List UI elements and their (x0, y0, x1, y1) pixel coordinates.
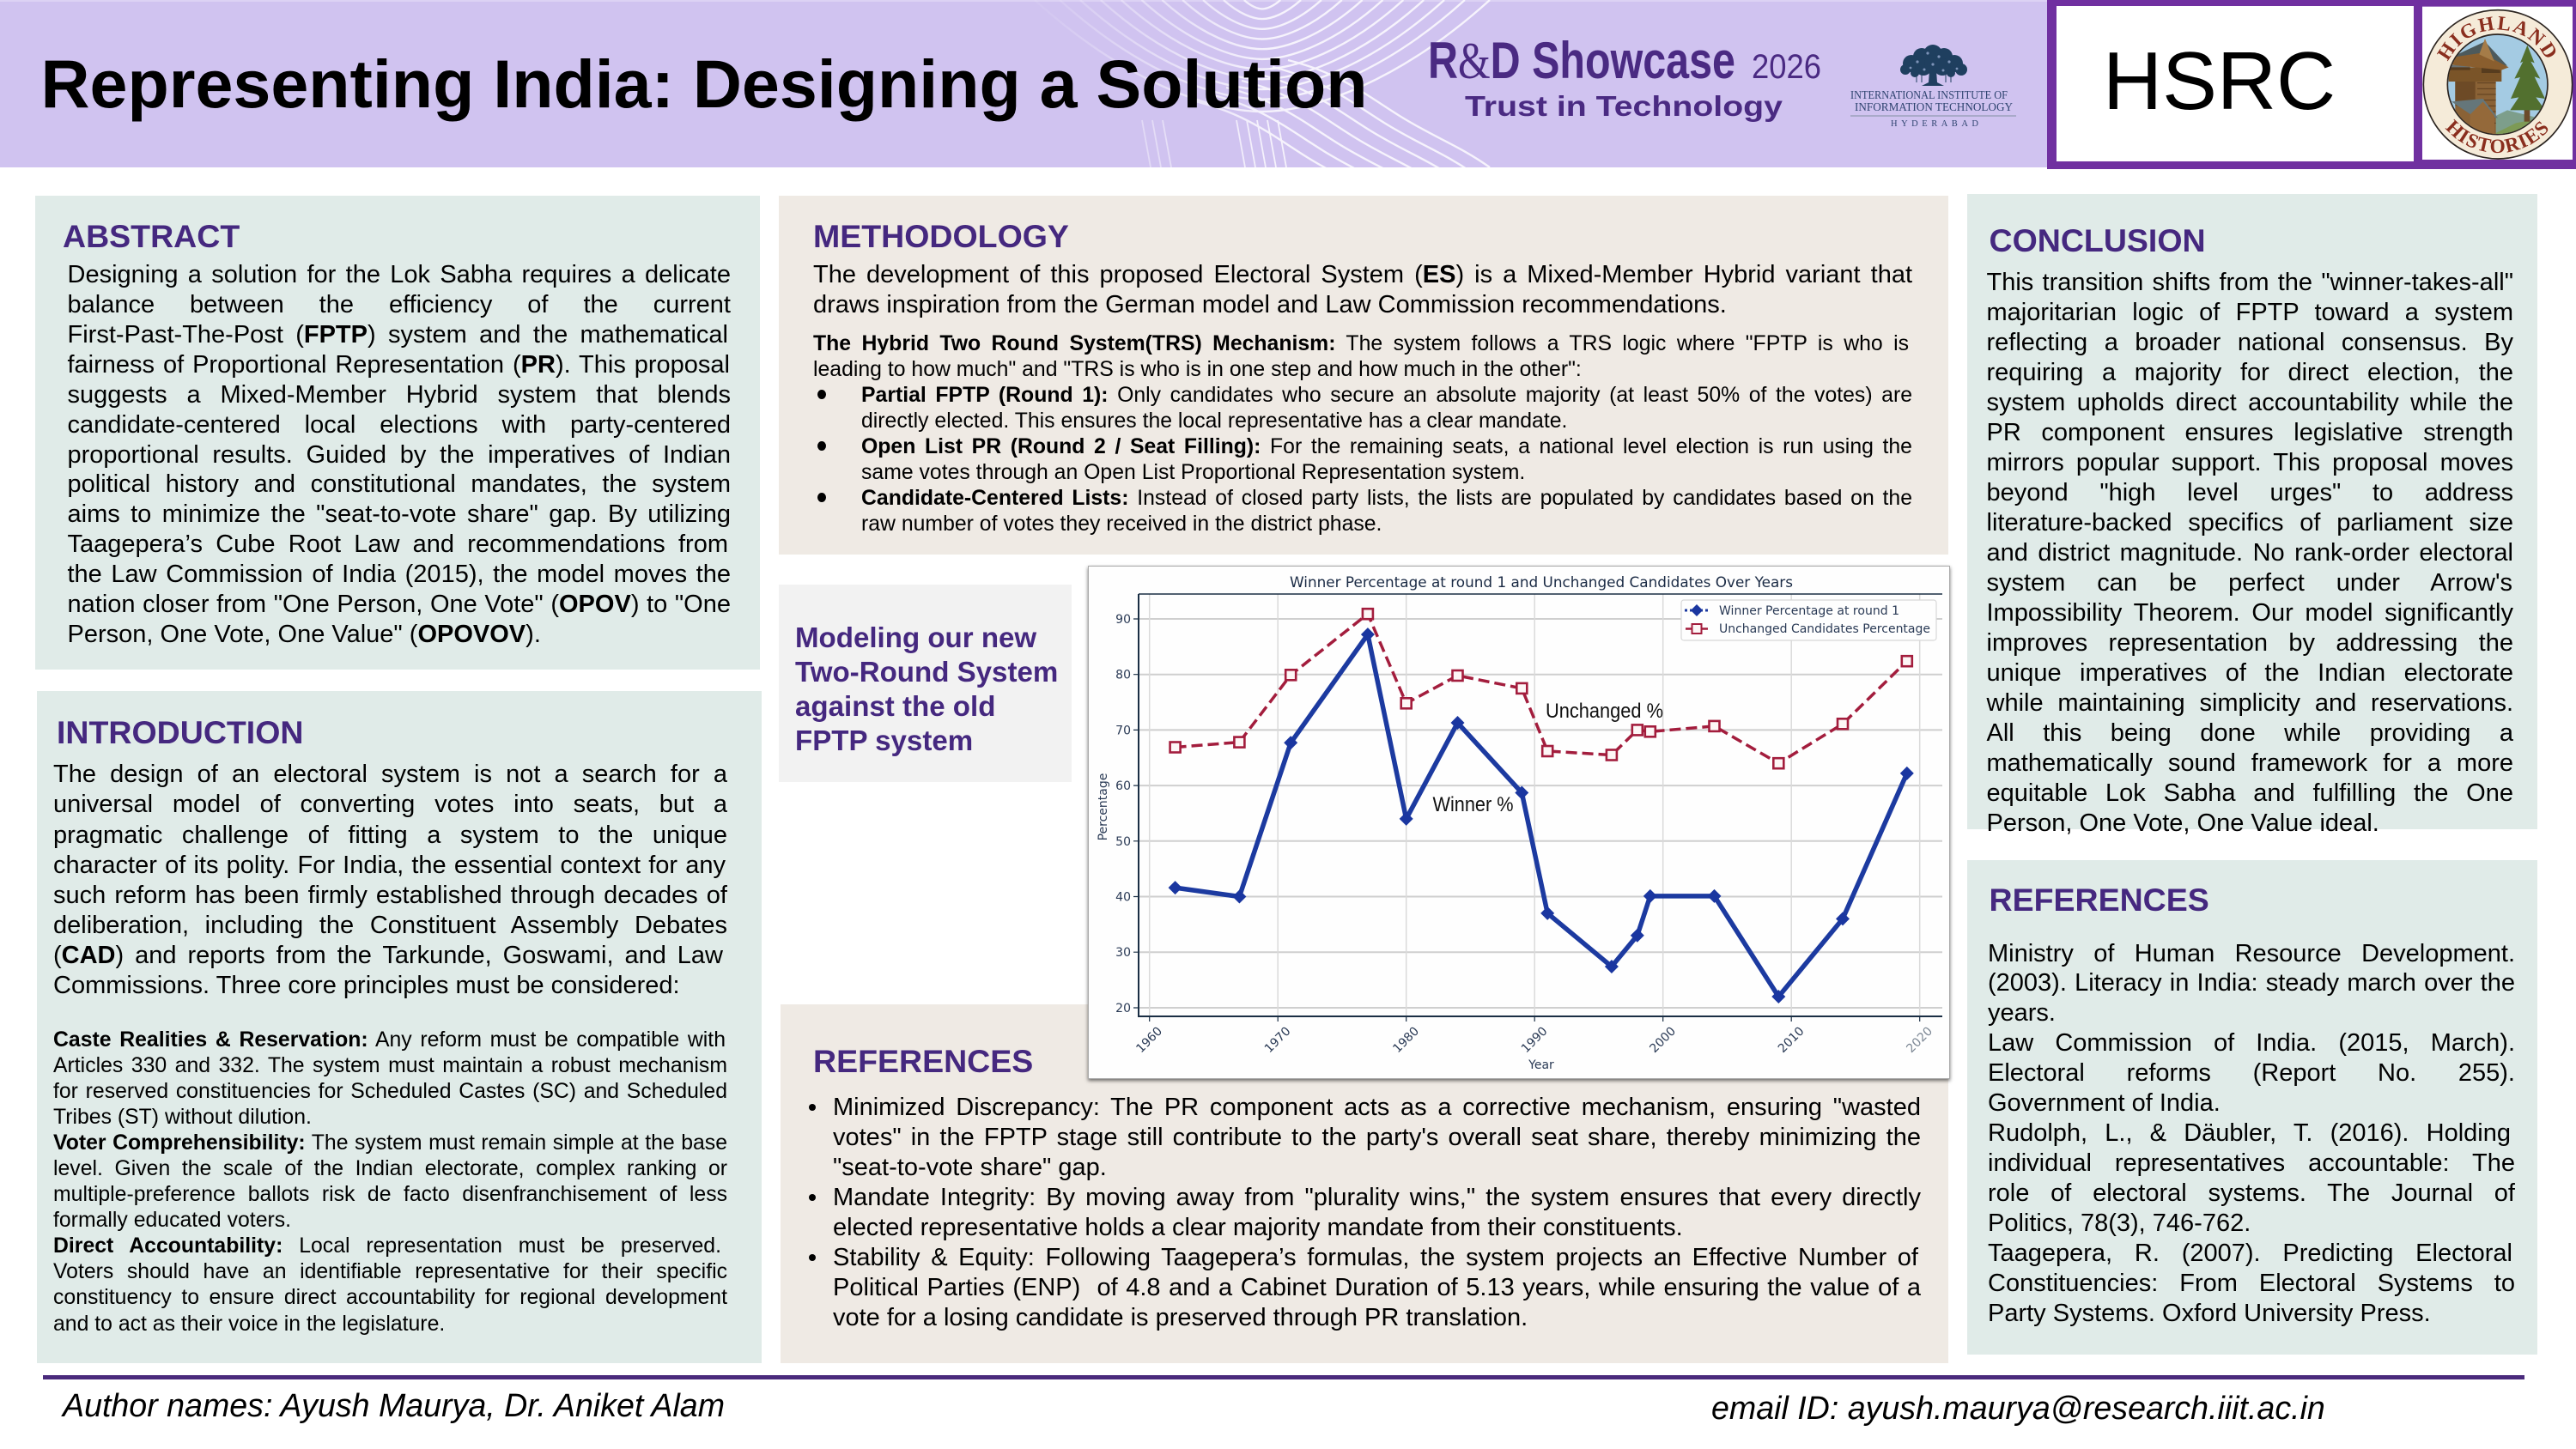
IIIT Hyderabad wordmark: HYDERABAD (1891, 119, 1978, 129)
bullet list: mechanism rounds: raw number of votes they received in the district phase. (861, 512, 1382, 536)
callout: modeling the two-round system: Modeling our new (795, 622, 1036, 654)
text block: three core principles: Articles 330 and 332. The system must maintain a robust mechanism (53, 1054, 727, 1077)
text block: abstract body: balance between the efficiency of the current (67, 291, 731, 318)
text block: introduction body: pragmatic challenge of fitting a system to the unique (53, 822, 727, 849)
text block: methodology intro: The development of this proposed Electoral System (ES) is a Mixed-Member Hybrid variant that (813, 261, 1912, 288)
text block: conclusion body: PR component ensures legislative strength (1987, 419, 2513, 446)
text block: conclusion body: majoritarian logic of FPTP toward a system (1987, 299, 2513, 326)
y axis label: Percentage (1097, 773, 1110, 840)
text block: abstract body: suggests a Mixed-Member Hybrid system that blends (67, 381, 731, 409)
bullet list: mechanism rounds: Open List PR (Round 2 / Seat Filling): For the remaining seats, a national level election is run using the (861, 435, 1912, 458)
IIIT Hyderabad wordmark (1850, 88, 2016, 129)
bullet list: outcomes: Stability & Equity: Following Taagepera’s formulas, the system projects an Effective Number of (833, 1244, 1918, 1271)
text block: introduction body: character of its polity. For India, the essential context for any (53, 852, 726, 879)
x axis label: Year (1528, 1058, 1554, 1072)
chart title: Winner Percentage at round 1 and Unchanged Candidates Over Years (1290, 574, 1793, 591)
bullet list: outcomes: Minimized Discrepancy: The PR component acts as a corrective mechanism, ensuring "wasted (833, 1094, 1921, 1121)
annotation: winner: Winner % (1432, 793, 1513, 816)
text block: reference list: Law Commission of India. (2015, March). (1988, 1029, 2515, 1057)
heading: methodology: METHODOLOGY (813, 218, 1069, 254)
bullet list: mechanism rounds: Partial FPTP (Round 1): Only candidates who secure an absolute majority (at least 50% of the votes) are (861, 384, 1912, 407)
text block: conclusion body: system can be perfect under Arrow's (1987, 568, 2512, 596)
chart tick labels: 50 (1115, 835, 1131, 849)
chart: winner percentage and unchanged candidates over years (1088, 566, 1950, 1079)
icon: IIIT Hyderabad tree logo (1900, 45, 1967, 86)
text block: abstract body: nation closer from "One Person, One Vote" (OPOV) to "One (67, 591, 731, 618)
title: Representing India: Designing a Solution (41, 45, 1367, 122)
text block: abstract body (67, 261, 731, 648)
text block: reference list: Constituencies: From Electoral Systems to (1988, 1270, 2515, 1297)
text block: conclusion body: unique imperatives of the Indian electorate (1987, 659, 2513, 687)
bullet list: mechanism rounds: same votes through an Open List Proportional Representation system. (861, 461, 1525, 484)
text block: introduction body: universal model of converting votes into seats, but a (53, 791, 727, 818)
text block: abstract body: fairness of Proportional Representation (PR). This proposal (67, 351, 730, 379)
text block: reference list: Politics, 78(3), 746-762. (1988, 1210, 2251, 1237)
heading: introduction: INTRODUCTION (57, 714, 303, 750)
HSRC label box (2047, 0, 2576, 169)
text block: reference list: Ministry of Human Resource Development. (1988, 939, 2515, 967)
text block: conclusion body: All this being done while providing a (1987, 719, 2513, 747)
text block: three core principles: Tribes (ST) without dilution. (53, 1106, 312, 1129)
text block: conclusion body: system upholds direct accountability while the (1987, 388, 2513, 415)
text block: abstract body: Designing a solution for the Lok Sabha requires a delicate (67, 261, 731, 288)
text block: conclusion body: equitable Lok Sabha and fulfilling the One (1987, 779, 2513, 807)
bullet list: outcomes: vote for a losing candidate is preserved through PR translation. (833, 1304, 1528, 1331)
heading: references: REFERENCES (813, 1043, 1033, 1079)
text block: three core principles: level. Given the scale of the Indian electorate, complex ranking or (53, 1157, 727, 1180)
R&D Showcase heading: Trust in Technology (1465, 90, 1783, 122)
text block: three core principles: Direct Accountability: Local representation must be preserved. (53, 1234, 721, 1258)
panel: references (1967, 860, 2537, 1355)
chart tick labels: 70 (1115, 724, 1131, 737)
text block: three core principles: formally educated voters. (53, 1209, 291, 1232)
text block: three core principles (53, 1028, 727, 1336)
text block: three core principles: Voters should have an identifiable representative for their specific (53, 1260, 727, 1283)
text block: conclusion body: and district magnitude. No rank-order electoral (1987, 539, 2513, 567)
chart tick labels: 30 (1115, 946, 1131, 960)
chart grid (1139, 594, 1942, 1016)
text block: conclusion body: requiring a majority for direct election, the (1987, 359, 2513, 386)
chart tick labels: 1990 (1519, 1024, 1550, 1056)
bullet list: outcomes: Mandate Integrity: By moving away from "plurality wins," the system ensures that every directly (833, 1184, 1921, 1211)
footer: email: email ID: ayush.maurya@research.iiit.ac.in (1711, 1390, 2325, 1426)
callout: modeling the two-round system: Two-Round System (795, 657, 1058, 688)
text block: conclusion body: while maintaining simplicity and reservations. (1987, 688, 2513, 716)
text block: introduction body: such reform has been firmly established through decades of (53, 882, 727, 909)
footer: author names: Author names: Ayush Maurya, Dr. Aniket Alam (63, 1387, 725, 1423)
text block: three core principles: multiple-preference ballots risk de facto disenfranchisement of less (53, 1183, 727, 1206)
text block: conclusion body: This transition shifts from the "winner-takes-all" (1987, 268, 2513, 295)
bullet list: outcomes: "seat-to-vote share" gap. (833, 1154, 1107, 1181)
text block: abstract body: political history and constitutional mandates, the system (67, 470, 731, 498)
heading: abstract: ABSTRACT (63, 218, 240, 254)
text block: hybrid TRS mechanism: The Hybrid Two Round System(TRS) Mechanism: The system follows a TRS logic where "FPTP is who is (813, 332, 1909, 355)
heading: conclusion: CONCLUSION (1989, 222, 2206, 258)
text block: abstract body: the Law Commission of India (2015), the model moves the (67, 561, 731, 588)
text block: abstract body: candidate-centered local elections with party-centered (67, 411, 731, 439)
text block: reference list: years. (1988, 999, 2056, 1027)
bullet list: outcomes (809, 1094, 1921, 1331)
decorative wave lines (1068, 0, 1491, 167)
chart tick labels: 90 (1115, 613, 1131, 627)
chart legend (1681, 600, 1936, 640)
text block: conclusion body: improves representation by addressing the (1987, 628, 2513, 656)
text block: introduction body: Commissions. Three core principles must be considered: (53, 972, 680, 999)
text block: reference list: role of electoral systems. The Journal of (1988, 1179, 2515, 1207)
callout: modeling the two-round system: against the old (795, 691, 995, 723)
footer rule (43, 1375, 2524, 1379)
IIIT Hyderabad wordmark: INTERNATIONAL INSTITUTE OF (1850, 88, 2008, 101)
text block: reference list (1988, 939, 2515, 1327)
text block: abstract body: aims to minimize the "seat-to-vote share" gap. By utilizing (67, 500, 731, 528)
chart tick labels: 2010 (1776, 1024, 1807, 1056)
text block: conclusion body: mathematically sound framework for a more (1987, 749, 2513, 776)
R&D Showcase heading: 2026 (1752, 48, 1821, 86)
chart legend: Unchanged Candidates Percentage (1719, 622, 1930, 636)
text block: three core principles: for reserved constituencies for Scheduled Castes (SC) and Scheduled (53, 1080, 727, 1103)
text block: conclusion body: Impossibility Theorem. Our model significantly (1987, 599, 2513, 627)
line series: unchanged candidates (1176, 614, 1907, 763)
chart tick labels (1115, 613, 1935, 1056)
panel: methodology (779, 196, 1948, 555)
HSRC label box: HSRC (2103, 35, 2336, 127)
heading: references: REFERENCES (1989, 882, 2209, 918)
text block: abstract body: First-Past-The-Post (FPTP) system and the mathematical (67, 321, 728, 349)
text block: conclusion body: literature-backed specifics of parliament size (1987, 508, 2513, 536)
annotation: unchanged: Unchanged % (1546, 700, 1663, 723)
chart tick labels: 1960 (1133, 1024, 1165, 1056)
R&D Showcase heading: R&D Showcase (1428, 32, 1735, 89)
panel: conclusion (1967, 194, 2537, 829)
chart axes (1133, 594, 1942, 1022)
text block: introduction body: deliberation, including the Constituent Assembly Debates (53, 912, 727, 939)
text block: reference list: Government of India. (1988, 1089, 2221, 1117)
callout: modeling the two-round system: FPTP system (795, 725, 973, 757)
text block: hybrid TRS mechanism (813, 332, 1909, 381)
panel: abstract (35, 196, 760, 670)
text block: three core principles: Voter Comprehensibility: The system must remain simple at the base (53, 1131, 727, 1155)
text block: conclusion body: reflecting a broader national consensus. By (1987, 328, 2513, 355)
callout: modeling the two-round system (779, 585, 1072, 782)
text block: three core principles: Caste Realities & Reservation: Any reform must be compatible with (53, 1028, 726, 1052)
text block: conclusion body: Person, One Vote, One Value ideal. (1987, 809, 2379, 836)
text block: methodology intro (813, 261, 1912, 318)
chart tick labels: 80 (1115, 669, 1131, 682)
text block: abstract body: proportional results. Guided by the imperatives of Indian (67, 441, 731, 469)
bullet list: outcomes: elected representative holds a clear majority mandate from their constituents. (833, 1214, 1683, 1241)
bullet list: mechanism rounds (817, 384, 1912, 536)
icon: Highland Histories logo: HISTORIES (2445, 118, 2549, 153)
text block: conclusion body: beyond "high level urges" to address (1987, 479, 2513, 506)
text block: introduction body: (CAD) and reports from the Tarkunde, Goswami, and Law (53, 942, 723, 969)
text block: methodology intro: draws inspiration from the German model and Law Commission recommendations. (813, 291, 1727, 318)
line series: winner percentage (1176, 634, 1907, 997)
text block: conclusion body: mirrors popular support. This proposal moves (1987, 448, 2513, 476)
text block: reference list: individual representatives accountable: The (1988, 1149, 2515, 1177)
text block: reference list: Electoral reforms (Report No. 255). (1988, 1059, 2515, 1087)
text block: abstract body: Person, One Vote, One Value" (OPOVOV). (67, 621, 541, 648)
chart tick labels: 2000 (1647, 1024, 1679, 1056)
chart tick labels: 60 (1115, 779, 1131, 793)
chart tick labels: 1980 (1390, 1024, 1422, 1056)
bullet list: outcomes: votes" in the FPTP stage still contribute to the party's overall seat share, thereby minimizing the (833, 1124, 1921, 1151)
chart tick labels: 2020 (1904, 1024, 1935, 1056)
bullet list: mechanism rounds: Candidate-Centered Lists: Instead of closed party lists, the lists are populated by candidates based on the (861, 487, 1912, 510)
text block: three core principles: and to act as their voice in the legislature. (53, 1313, 445, 1336)
text block: reference list: Rudolph, L., & Däubler, T. (2016). Holding (1988, 1119, 2511, 1147)
bullet list: mechanism rounds: directly elected. This ensures the local representative has a clear mandate. (861, 409, 1567, 433)
panel: introduction (37, 691, 762, 1363)
icon: Highland Histories logo (2422, 7, 2573, 160)
header banner (0, 0, 2576, 169)
chart legend: Winner Percentage at round 1 (1719, 604, 1899, 618)
R&D Showcase heading (1428, 32, 1821, 122)
IIIT Hyderabad wordmark: INFORMATION TECHNOLOGY (1855, 100, 2013, 113)
text block: three core principles: constituency to ensure direct accountability for regional development (53, 1286, 727, 1309)
text block: introduction body (53, 761, 727, 999)
chart tick labels: 1970 (1262, 1024, 1293, 1056)
text block: introduction body: The design of an electoral system is not a search for a (53, 761, 727, 788)
text block: conclusion body (1987, 268, 2513, 836)
panel: references (results) (781, 1004, 1948, 1363)
text block: reference list: (2003). Literacy in India: steady march over the (1988, 969, 2515, 997)
chart tick labels: 20 (1115, 1002, 1131, 1016)
text block: abstract body: Taagepera’s Cube Root Law and recommendations from (67, 530, 728, 558)
chart tick labels: 40 (1115, 891, 1131, 905)
text block: reference list: Party Systems. Oxford University Press. (1988, 1300, 2431, 1327)
text block: hybrid TRS mechanism: leading to how much" and "TRS is who is in one step and how much in the other": (813, 358, 1582, 381)
text block: reference list: Taagepera, R. (2007). Predicting Electoral (1988, 1240, 2512, 1267)
bullet list: outcomes: Political Parties (ENP) of 4.8 and a Cabinet Duration of 5.13 years, while ensuring the value of a (833, 1274, 1921, 1301)
icon: Highland Histories logo: HIGHLAND (2437, 16, 2555, 62)
